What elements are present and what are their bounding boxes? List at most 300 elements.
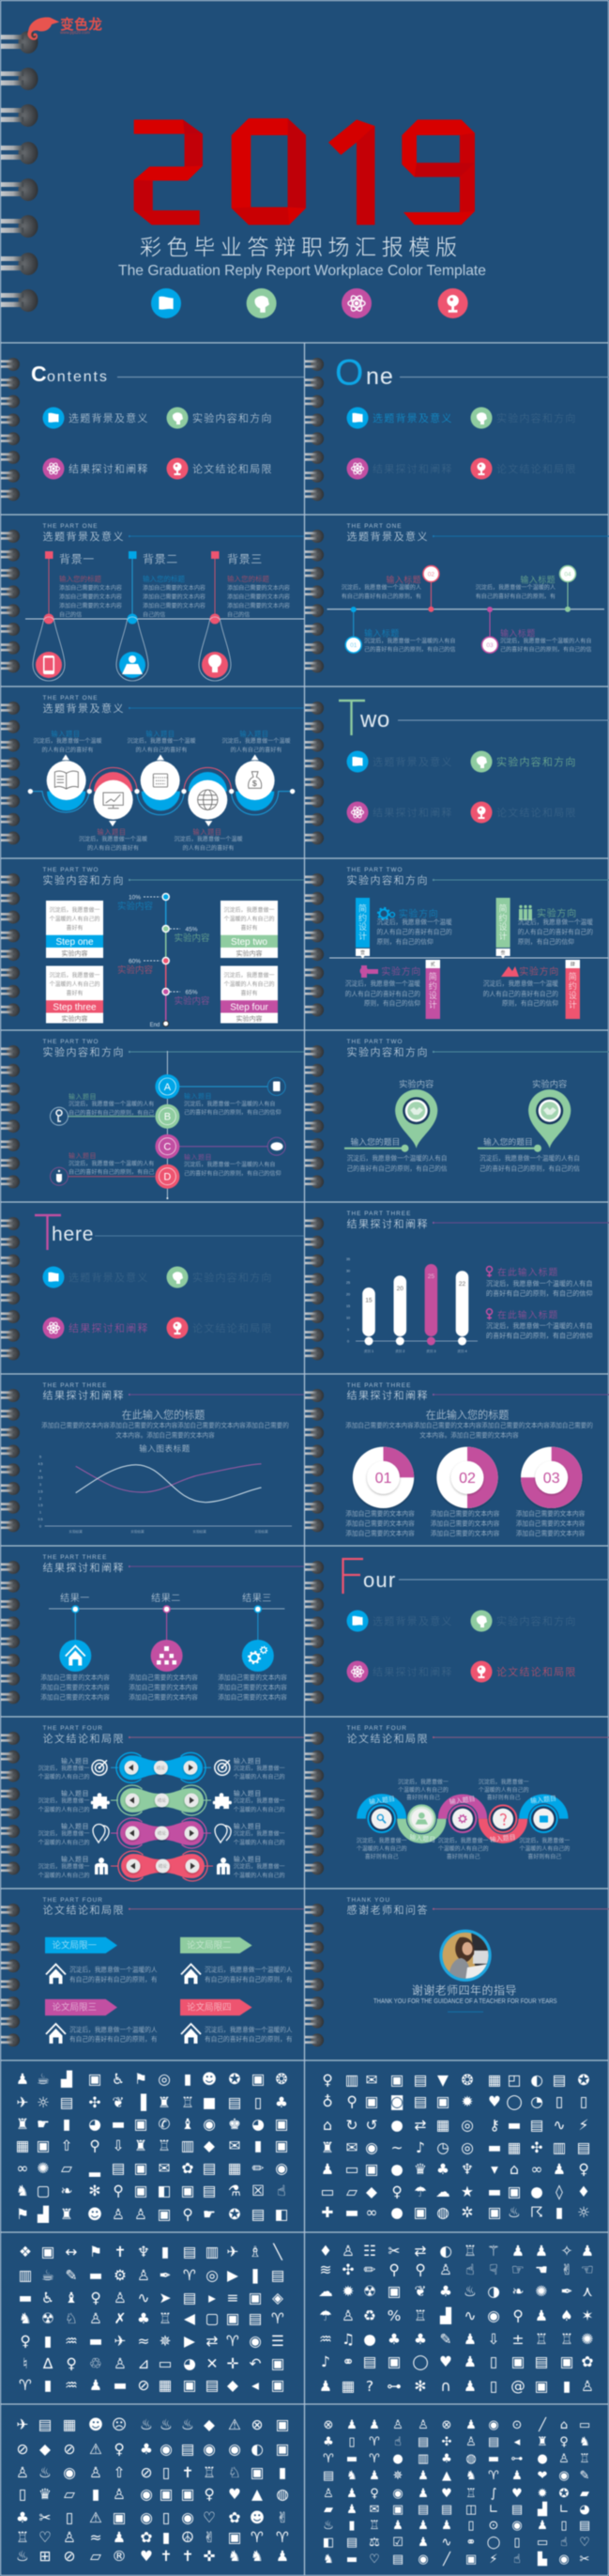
donut 02: 02 <box>459 1471 476 1487</box>
wave captions: 的人有自己的喜好有 <box>231 746 282 753</box>
panel: experiment ribbons <box>305 867 609 1019</box>
heading: contents: ontents <box>47 369 109 385</box>
panel: section three <box>1 1215 304 1360</box>
node A: A <box>164 1082 172 1093</box>
node A: 输入题目 <box>184 1091 212 1101</box>
spine line <box>166 1051 168 1198</box>
panel: results bar chart <box>305 1211 609 1360</box>
map pin one: 实验内容 <box>399 1078 434 1089</box>
menu items: 结果探讨和阐释 <box>69 1322 149 1334</box>
header <box>347 1725 609 1745</box>
limitation two <box>180 1937 293 1983</box>
row two: 输入题目 <box>61 1789 89 1797</box>
header: 选题背景及意义 <box>43 530 124 543</box>
node C: 输入题目 <box>184 1153 212 1161</box>
header: THE PART ONE <box>347 523 403 530</box>
milestone 03: 03 <box>486 642 494 649</box>
header <box>347 1211 609 1230</box>
panel: icon set 5 <box>16 2416 289 2565</box>
vertical progress line <box>144 894 180 1026</box>
header: THE PART FOUR <box>43 1725 103 1732</box>
panel: icon set 6: ♞▬♡▤◉╱▣⚡☝▙◉✂ <box>323 2551 590 2567</box>
header <box>347 523 609 543</box>
map pin one <box>344 1078 448 1172</box>
panel: experiment ABCD chain <box>1 1039 304 1199</box>
node B: 输入题目 <box>69 1092 97 1101</box>
milestone 04: 有自己的喜好有自己的原则，有 <box>476 593 556 600</box>
pin three: 添加自己需要的文本内容 <box>227 593 290 600</box>
progress labels: 实验内容 <box>174 995 210 1007</box>
pin two: 输入您的标题 <box>143 574 185 583</box>
bar chart: 类别 2 <box>395 1349 404 1353</box>
icon: green hand <box>247 288 277 318</box>
heading: One: ne <box>366 363 394 390</box>
row four: 沉淀后，我愿意做一 <box>234 1863 285 1871</box>
wave diagram: $ <box>252 779 257 788</box>
ribbon block one: 原则，有自己的信仰 <box>377 937 434 946</box>
panel: conclusion wave <box>305 1725 609 1874</box>
map pin two: 沉淀后，我愿意做一个温暖的人有自 <box>480 1154 580 1163</box>
donut 03: 添加自己需要的文本内容 <box>516 1529 586 1537</box>
limitation one: 论文局限一 <box>53 1940 98 1951</box>
pin one: 背景一 <box>59 552 95 565</box>
spine end dot <box>166 1197 168 1199</box>
line chart: 1.5 <box>38 1504 43 1507</box>
wave captions: 沉淀后，我愿意做一个温暖 <box>221 737 291 745</box>
panel: section four <box>305 1559 609 1704</box>
panel: icon set 3: ♈▮♒♟▬⊘▦▣▤◆◂▣ <box>19 2377 284 2394</box>
spiral binding <box>1 31 38 312</box>
ribbon block two: 的人有自己的喜好有自己的 <box>518 928 593 935</box>
ribbon block four: 原则，有自己的信仰 <box>502 998 558 1007</box>
milestone 02 <box>342 565 439 612</box>
menu items: 论文结论和局限 <box>496 1666 577 1678</box>
bar chart: 35 <box>346 1257 350 1261</box>
milestone 04: 输入标题 <box>520 574 556 584</box>
node B: B <box>164 1112 171 1123</box>
panel: experiment steps <box>1 867 304 1028</box>
ribbon block one: 的人有自己的喜好有自己的 <box>377 928 452 935</box>
wave captions: 输入题目 <box>192 828 222 837</box>
row three: 输入题目 <box>234 1822 262 1830</box>
wave captions: 沉淀后，我愿意做一个温暖 <box>174 836 243 843</box>
progress labels: 65% <box>185 990 198 995</box>
arc chain diagram: 输入题目 <box>489 1833 516 1843</box>
panel: background wave <box>1 695 304 852</box>
ribbon block one: 沉淀后，我愿意做一个温暖 <box>377 918 452 926</box>
panel: conclusion dumbbells <box>1 1725 304 1881</box>
card: step three: 喜好有 <box>66 989 84 996</box>
icon: red microphone <box>438 288 468 318</box>
result one: 结果一 <box>60 1593 90 1604</box>
milestone 04: 沉淀后，我愿意做一个温暖的人 <box>476 584 556 592</box>
progress labels: 10% <box>129 894 141 902</box>
pin three: 自己的信 <box>227 610 250 618</box>
donut 01: 添加自己需要的文本内容 <box>345 1509 415 1518</box>
legend two: 在此输入标题 <box>497 1309 558 1320</box>
menu items: 实验内容和方向 <box>192 1271 273 1284</box>
row one: 沉淀后，我愿意做一 <box>234 1765 285 1772</box>
row four <box>38 1851 285 1881</box>
photo portrait <box>439 1930 492 1982</box>
header <box>43 1382 304 1401</box>
arc chain diagram: 沉淀后，我愿意做一 <box>479 1778 529 1785</box>
bar chart <box>346 1257 478 1353</box>
card: step two: 喜好有 <box>240 924 258 932</box>
result one: 添加自己需要的文本内容 <box>40 1683 110 1691</box>
progress labels <box>117 894 210 1028</box>
menu items <box>347 408 577 479</box>
logo: www.ppt20.com <box>60 30 90 35</box>
result one: 添加自己需要的文本内容 <box>40 1674 110 1682</box>
panel: icon set 4: ♒♫●♣♣✎♟⇩±♖♖✺ <box>319 2331 593 2348</box>
timeline line <box>327 609 604 610</box>
card: step four: Step four <box>230 1003 268 1012</box>
header: THE PART TWO <box>43 1039 99 1045</box>
node C: C <box>163 1142 171 1153</box>
milestone 01 <box>345 607 456 654</box>
result two: 添加自己需要的文本内容 <box>129 1674 198 1682</box>
header: 实验内容和方向 <box>347 1045 428 1058</box>
limitation four <box>180 1999 293 2044</box>
limitation three: 论文局限三 <box>53 2002 97 2013</box>
panel: icon set 4 <box>318 2243 594 2395</box>
milestone 02: 有自己的喜好有自己的原则，有 <box>342 593 421 600</box>
card: step four <box>221 965 278 1024</box>
card: step three: 实验内容 <box>62 1014 88 1023</box>
node D: 自己的喜好有自己的原则，有自己 <box>69 1168 154 1176</box>
panel: icon set 6: ◧▤⚖☑♟∿⚭◯▯▭☝♡ <box>323 2536 590 2550</box>
limitation three: 沉淀后，我愿意做一个温暖的人 <box>69 2025 158 2033</box>
pin two: 背景二 <box>143 552 178 565</box>
legend two <box>486 1309 593 1339</box>
pin three: 背景三 <box>227 552 263 565</box>
pin three <box>199 551 290 681</box>
limitation two: 论文局限二 <box>187 1940 232 1951</box>
donut 02: 添加自己需要的文本内容 <box>431 1519 500 1528</box>
intro text <box>41 1409 289 1440</box>
milestone 03: 己的喜好有自己的原则，有自己的信 <box>500 646 591 654</box>
row one: 输入题目 <box>61 1756 89 1765</box>
pin one: 输入您的标题 <box>59 574 101 583</box>
milestone 03: 沉淀后，我愿意做一个温暖的人有自 <box>500 637 591 644</box>
result three: 结果三 <box>242 1593 272 1604</box>
timeline line <box>25 618 304 620</box>
donut 01: 添加自己需要的文本内容 <box>345 1519 415 1528</box>
row three: 结论 <box>158 1830 166 1837</box>
heading: Four <box>343 1559 609 1594</box>
line chart: 实验结果 <box>254 1529 268 1534</box>
card: step one: 个温暖的人有自己的 <box>49 915 100 922</box>
panel: icon set 6: ♨▮♖♟♟♟▯⊙◉♟▯▤ <box>323 2519 590 2533</box>
card: step one: 实验内容 <box>62 949 88 958</box>
node B <box>51 1092 179 1129</box>
panel: icon set 3: ▥☕✎▬⚙♙✒♈◎▶❚▤ <box>19 2267 284 2284</box>
bar chart: 0 <box>347 1339 349 1343</box>
card: step two <box>221 901 278 958</box>
pin one <box>33 551 122 681</box>
row four: 输入题目 <box>61 1855 89 1863</box>
panel: icon set 2 <box>321 2072 590 2221</box>
header: 实验内容和方向 <box>347 873 428 887</box>
pin two <box>116 551 206 681</box>
node B: 自己的喜好有自己的原则，有自己 <box>69 1109 154 1117</box>
row two <box>38 1785 285 1815</box>
panel: results three points <box>1 1554 304 1704</box>
donut 03: 添加自己需要的文本内容 <box>516 1509 586 1518</box>
row three: 个温暖的人有自己的 <box>38 1839 89 1846</box>
menu items: 结果探讨和阐释 <box>373 807 453 819</box>
menu items: 选题背景及意义 <box>69 1271 149 1284</box>
pin three: 输入您的标题 <box>227 574 269 583</box>
ribbon block one: 简约设计 <box>358 903 367 941</box>
card: step one: Step one <box>55 937 94 948</box>
closing subtitle: THANK YOU FOR THE GUIDANCE OF A TEACHER FOR FOUR YEARS <box>373 1997 557 2005</box>
bar chart: 20 <box>346 1292 350 1296</box>
donut 02: 添加自己需要的文本内容 <box>431 1509 500 1518</box>
header: 论文结论和局限 <box>43 1905 124 1916</box>
row two: 个温暖的人有自己的 <box>234 1806 285 1813</box>
header: 结果探讨和阐释 <box>43 1562 124 1574</box>
line chart: 0 <box>39 1524 41 1528</box>
arc chain diagram: 沉淀后，我愿意做一 <box>519 1837 570 1844</box>
panel: background milestones <box>305 523 609 672</box>
arc chain diagram: 个温暖的人有自己的 <box>438 1845 489 1853</box>
line chart: 2 <box>39 1497 41 1501</box>
row three: 个温暖的人有自己的 <box>234 1839 285 1846</box>
pin three: 添加自己需要的文本内容 <box>227 602 290 609</box>
legend one: 在此输入标题 <box>497 1267 558 1278</box>
panel: results donuts <box>305 1382 609 1537</box>
result two: 添加自己需要的文本内容 <box>129 1693 198 1702</box>
wave captions: 的人有自己的喜好有 <box>42 746 93 753</box>
ribbon block two: 简约设计 <box>498 903 508 941</box>
ribbon block three: 沉淀后，我愿意做一个温暖 <box>345 979 420 987</box>
node A <box>155 1074 285 1116</box>
donut 01 <box>345 1447 415 1537</box>
result three <box>218 1593 287 1702</box>
header: THE PART TWO <box>347 867 403 873</box>
panel: icon set 3: ♞☢♘♙✗♣♖◀▢▣▤♈ <box>19 2310 284 2327</box>
map pin two: 输入您的题目 <box>483 1136 533 1147</box>
menu items: 实验内容和方向 <box>192 411 273 424</box>
ribbon block three: 贰 <box>431 962 435 967</box>
menu items: 实验内容和方向 <box>496 755 577 768</box>
panel: icon set 1: ⚑▟♜☻♙♙▣⚲☛✪▤◧ <box>16 2205 288 2223</box>
arc chain diagram: 喜好则有自己 <box>527 1853 561 1860</box>
ribbon block three <box>345 960 440 1019</box>
panel: icon set 2: ♟▭▣●♛♣♆▾⌂∞♟♀ <box>321 2161 589 2178</box>
progress labels: 实验内容 <box>117 964 153 976</box>
legend one: 沉淀后，我愿意做一个温暖的人有自 <box>486 1279 593 1288</box>
panel: icon set 6: ▰♟✉▣▤▤◫∟▤▟∟◕ <box>324 2501 590 2517</box>
panel: icon set 5: ♖♡♙≈♟✿▮☮✌▣♈♈ <box>16 2529 289 2546</box>
row two: 个温暖的人有自己的 <box>38 1806 89 1813</box>
arc chain diagram: 输入题目 <box>409 1833 436 1843</box>
limitation one: 有自己的喜好有自己的原则，有 <box>69 1975 158 1983</box>
pin two: 添加自己需要的文本内容 <box>143 584 206 592</box>
ribbon block two: 原则，有自己的信仰 <box>518 937 574 946</box>
arc chain diagram: 沉淀后，我愿意做一 <box>398 1778 449 1785</box>
card: step three: Step three <box>53 1003 97 1012</box>
ribbon block three: 的人有自己的喜好有自己的 <box>345 989 420 997</box>
icon: purple atom <box>342 288 372 318</box>
bar chart: 30 <box>346 1270 350 1273</box>
header: THE PART THREE <box>347 1211 411 1217</box>
menu items: 选题背景及意义 <box>373 755 453 768</box>
panel: icon set 4: ≋✣✏⚲⚲♙☝☟☞☚✌☜ <box>319 2261 594 2278</box>
result three: 添加自己需要的文本内容 <box>218 1674 287 1682</box>
row one: 个温暖的人有自己的 <box>38 1773 89 1781</box>
card: step four: 喜好有 <box>240 989 258 996</box>
ribbon block one <box>356 898 452 959</box>
card: step four: 实验内容 <box>236 1014 263 1023</box>
map pin one: 输入您的题目 <box>351 1136 400 1147</box>
panel: cover <box>1 16 486 318</box>
node A: 沉淀后，我愿意做一个温暖的人有自 <box>184 1101 276 1108</box>
heading: One <box>335 353 609 393</box>
menu items: 选题背景及意义 <box>69 411 149 424</box>
header: 结果探讨和阐释 <box>347 1218 428 1230</box>
heading: Two <box>339 701 609 735</box>
row two: 沉淀后，我愿意做一 <box>234 1797 285 1805</box>
card: step four: 个温暖的人有自己的 <box>223 980 275 988</box>
arc chain diagram: 个温暖的人有自己的 <box>357 1845 407 1853</box>
wave captions: 输入题目 <box>97 828 127 837</box>
milestone 01: 01 <box>350 642 358 649</box>
panel: icon set 3 <box>19 2243 284 2394</box>
panel: icon set 3: ▬♿♝♀♙∿➤▤▸≡▣◈ <box>19 2290 283 2306</box>
panel: icon set 5: ✈▤▦☻☹♨♨♨◆⚠⊗▣ <box>17 2416 289 2433</box>
header: 选题背景及意义 <box>43 702 124 715</box>
pin two: 自己的信 <box>143 610 165 618</box>
row two: 结论 <box>158 1797 166 1804</box>
divider line <box>329 957 609 959</box>
milestone 03 <box>482 607 591 654</box>
header <box>43 1725 304 1745</box>
heading: One: O <box>335 353 363 393</box>
closing accent line <box>448 2011 483 2013</box>
bar chart: 15 <box>346 1304 350 1308</box>
heading: contents <box>31 362 304 386</box>
panel: icon set 5: ♙♨◉♙⇧⊘▯✝♖♘▣▮ <box>16 2464 286 2481</box>
header: THE PART TWO <box>347 1039 403 1045</box>
row three <box>38 1818 285 1848</box>
milestone 02: 沉淀后，我愿意做一个温暖的人 <box>342 584 421 592</box>
legend two: 的喜好有自己的原则，有自己的信仰 <box>486 1332 593 1339</box>
header <box>43 695 304 715</box>
panel: limitations <box>1 1897 304 2046</box>
header <box>347 867 609 887</box>
bar chart: 类别 3 <box>426 1349 435 1353</box>
menu items <box>347 751 577 823</box>
limitation four: 沉淀后，我愿意做一个温暖的人 <box>205 2025 293 2033</box>
arc chain diagram: 喜好则有自己 <box>406 1794 440 1801</box>
panel: icon set 5: ♣✂▯⚠▣◉▯◉♡✿☻✌ <box>16 2509 289 2526</box>
milestone 02: 02 <box>428 571 434 578</box>
row two: 输入题目 <box>234 1789 262 1797</box>
node D: D <box>163 1172 171 1183</box>
menu items: 选题背景及意义 <box>373 411 453 424</box>
header <box>43 1039 304 1058</box>
panel: experiment map pins <box>305 1039 609 1188</box>
intro text: 在此输入您的标题 <box>122 1409 205 1422</box>
arc chain diagram: 输入题目 <box>530 1794 556 1805</box>
donut 02 <box>431 1447 500 1537</box>
ribbon block three: 实验方向 <box>381 965 421 978</box>
intro text: 在此输入您的标题 <box>426 1409 509 1422</box>
row three: 输入题目 <box>61 1822 89 1830</box>
header: 选题背景及意义 <box>347 530 428 543</box>
pin one: 自己的信 <box>59 610 82 618</box>
header: 实验内容和方向 <box>43 873 124 887</box>
menu items: 实验内容和方向 <box>496 1614 577 1627</box>
node D: 沉淀后，我愿意做一个温暖的人有 <box>69 1160 154 1167</box>
line chart: 实验结果 <box>69 1529 83 1534</box>
milestone 03: 输入标题 <box>500 627 536 638</box>
node A: 己的喜好有自己的原则，有自己的信仰 <box>184 1108 282 1116</box>
wave captions: 的人有自己的喜好有 <box>87 844 139 852</box>
wave captions: 输入题目 <box>145 730 175 738</box>
bar chart: 5 <box>347 1328 349 1332</box>
header: 结果探讨和阐释 <box>347 1390 428 1401</box>
panel: icon set 4: ♦♙☷✂⇄◐♖⚚♟♟✧♟ <box>319 2243 594 2260</box>
limitation one <box>45 1937 158 1983</box>
menu items: 论文结论和局限 <box>496 807 577 819</box>
title number 2019 <box>134 118 475 224</box>
header <box>347 1382 609 1401</box>
bar chart: 类别 1 <box>364 1349 373 1353</box>
header: 论文结论和局限 <box>347 1733 428 1745</box>
row one: 结论 <box>157 1765 165 1771</box>
panel: icon set 4: ☂♙♻%♖▟∿◉⚲♟♠✶ <box>319 2306 593 2324</box>
wave captions: 沉淀后，我愿意做一个温暖 <box>127 737 196 745</box>
card: step two: Step two <box>231 937 267 948</box>
heading: Two: wo <box>359 707 390 733</box>
arc chain diagram: 输入题目 <box>449 1794 476 1806</box>
icon: blue flag <box>151 288 181 318</box>
panel: icon set 2: ♁⚲▣◙▤▣✹♥◯◔▯▯ <box>322 2093 587 2110</box>
panel: icon set 6 <box>323 2416 590 2567</box>
panel: icon set 1: ♟☕▟▣♿⚑◎▮☻✪▣❂ <box>16 2070 287 2088</box>
map pin two <box>478 1078 580 1172</box>
milestone 04: 04 <box>564 571 571 578</box>
limitation four: 论文局限四 <box>187 2002 232 2013</box>
ribbon block four: 实验方向 <box>519 965 559 978</box>
map pin two: 实验内容 <box>532 1078 567 1089</box>
donut 03: 03 <box>543 1471 560 1487</box>
ribbon block one: 壹 <box>360 949 365 956</box>
panel: icon set 3: ♮∆♀♲♙⊿▭◕✕✛↶▣ <box>23 2355 284 2372</box>
milestone 01: 输入标题 <box>364 627 400 638</box>
header: THANK YOU <box>347 1897 390 1904</box>
progress labels: 实验内容 <box>117 901 153 912</box>
header <box>347 1897 609 1916</box>
header: THE PART THREE <box>43 1382 107 1389</box>
result three: 添加自己需要的文本内容 <box>218 1683 287 1691</box>
menu items <box>43 1266 273 1339</box>
map pin one: 己的喜好有自己的原则，有自己的信 <box>347 1164 448 1172</box>
line chart: 4.5 <box>38 1462 43 1466</box>
menu items: 论文结论和局限 <box>192 1322 273 1334</box>
panel: icon set 1: ∞✺▱▂▤▣✉✿▤▦✏◉ <box>17 2160 288 2177</box>
line chart: 5 <box>39 1456 41 1459</box>
donut 01: 01 <box>375 1471 392 1487</box>
bar chart: 25 <box>428 1273 434 1280</box>
header <box>43 867 304 887</box>
panel: icon set 1: ✈☼▤✣❦▐♜♖■▤▯♣ <box>17 2093 288 2111</box>
result two <box>129 1593 198 1702</box>
